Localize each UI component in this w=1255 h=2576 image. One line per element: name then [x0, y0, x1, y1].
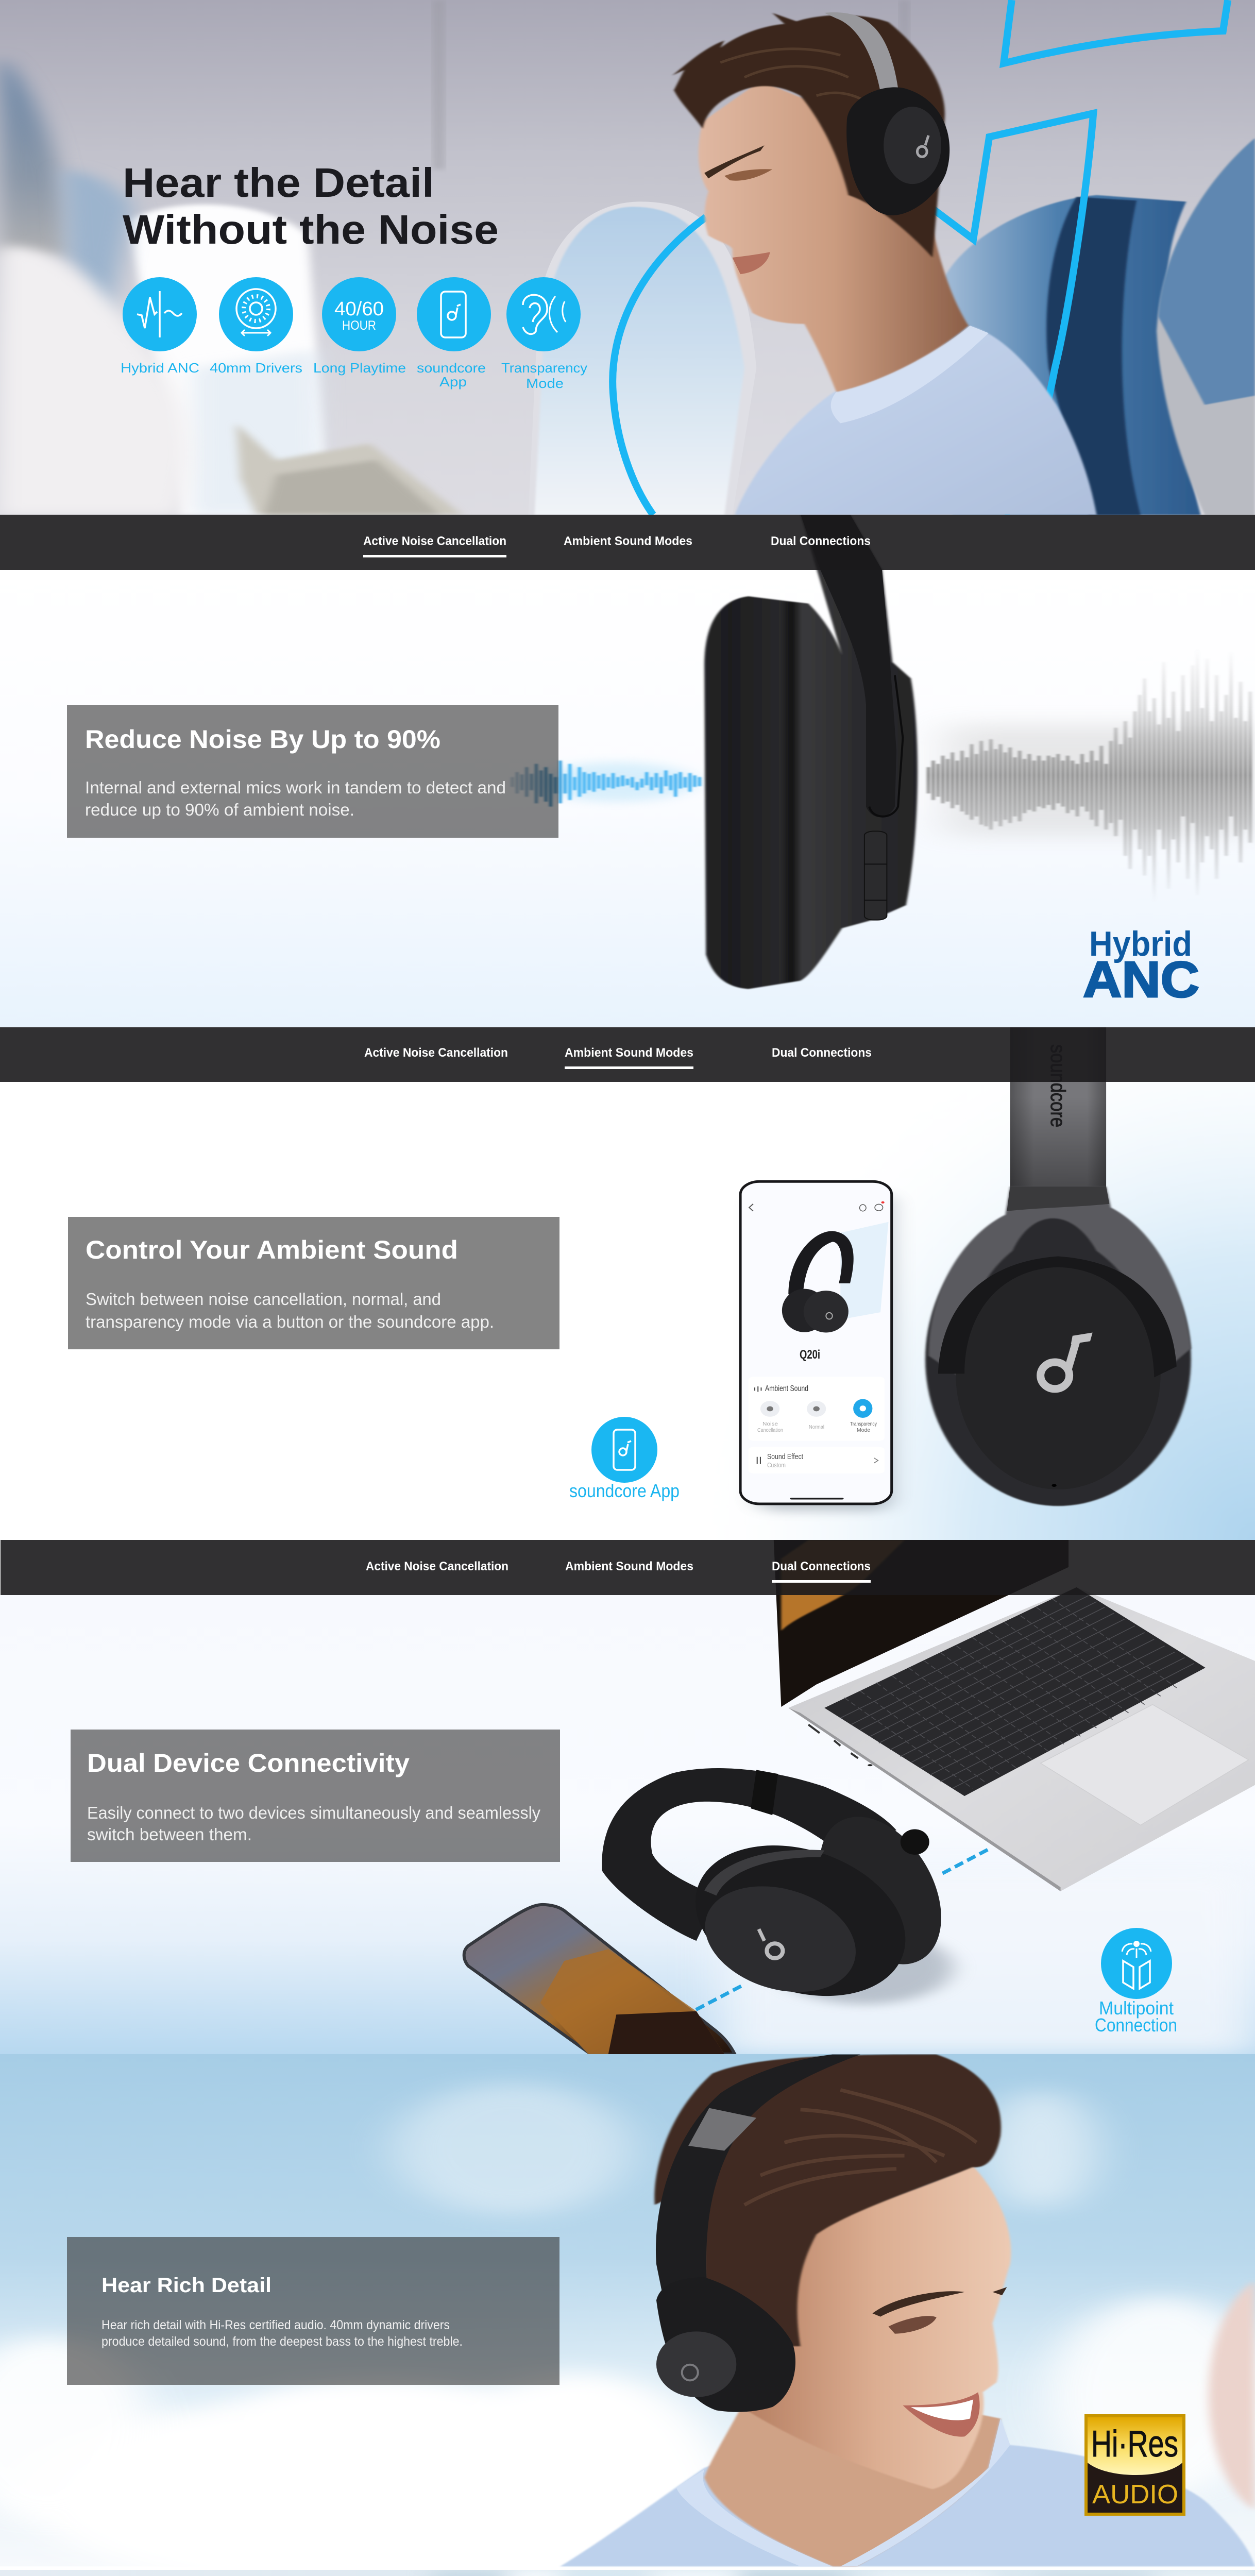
man: shirt	[735, 326, 1096, 515]
icon: multipoint connection: Multipoint	[1099, 1997, 1174, 2019]
text panel: reduce noise: Internal and external mics work in tandem to detect and	[85, 778, 506, 797]
icon: multipoint connection: Connection	[1095, 2014, 1177, 2036]
man: sweater	[561, 2418, 1255, 2566]
icon: playtime	[322, 277, 396, 351]
section: active noise cancellation	[0, 514, 1255, 1027]
logo: Hi-Res Audio: Hi·Res	[1091, 2424, 1178, 2465]
folded headphones	[602, 1768, 961, 2005]
text panel: ambient sound: Control Your Ambient Sound	[86, 1235, 458, 1264]
man: neck	[704, 2379, 1000, 2566]
icon captions: App	[439, 374, 467, 389]
laptop, phone and headphone flat lay	[464, 1529, 1255, 2054]
section: long-lasting playtime	[0, 2569, 1255, 2576]
big headphone	[925, 1023, 1191, 1506]
navigation bar 1	[0, 515, 1255, 570]
text panel: hear rich detail	[67, 2237, 559, 2385]
navigation bar 3: Active Noise Cancellation	[366, 1560, 508, 1573]
phone mockup: soundcore app: Noise	[762, 1421, 778, 1427]
phone mockup: soundcore app: Q20i	[800, 1348, 820, 1362]
text panel: ambient sound: Switch between noise cancellation, normal, and	[86, 1290, 441, 1309]
phone mockup: soundcore app: Ambient Sound	[765, 1384, 808, 1393]
section: hear rich detail	[0, 2054, 1255, 2576]
navigation bar 2: Dual Connections	[772, 1046, 872, 1060]
logo: Hybrid ANC: Hybrid	[1089, 924, 1192, 963]
laptop	[773, 1529, 1255, 1891]
sound wave: grey	[944, 724, 1255, 836]
icon: soundcore app badge	[569, 1417, 680, 1501]
navigation bar 3: Dual Connections	[772, 1560, 871, 1573]
man: hair	[654, 2055, 1001, 2346]
section: ambient sound	[0, 1023, 1255, 1540]
icon captions: soundcore	[417, 360, 486, 376]
icon: multipoint connection	[1095, 1928, 1177, 2036]
headphone ear cup	[704, 514, 918, 989]
icon captions: Mode	[526, 376, 564, 391]
man: face	[744, 2165, 1011, 2489]
logo: Hybrid ANC: ANC	[1083, 951, 1199, 1008]
icon: soundcore app	[417, 277, 491, 351]
photo: man against the sky	[0, 2054, 1255, 2576]
clouds	[0, 2083, 1255, 2576]
sound wave: blue	[536, 762, 697, 802]
phone mockup: soundcore app: Mode	[857, 1428, 870, 1433]
icon captions: Hybrid ANC	[121, 360, 199, 376]
text panel: reduce noise: reduce up to 90% of ambient noise.	[85, 800, 354, 819]
blue line art	[613, 0, 1228, 515]
navigation bar 2: Active Noise Cancellation	[364, 1046, 508, 1060]
logo: Hybrid ANC	[1083, 924, 1199, 1008]
navigation bar 1: Ambient Sound Modes	[564, 534, 692, 548]
phone mockup: soundcore app	[740, 1181, 892, 1511]
headphones on man	[656, 2055, 860, 2412]
icon: playtime: 40/60	[334, 298, 384, 320]
airplane seats	[941, 195, 1200, 515]
hero title	[123, 160, 499, 252]
navigation bar 3	[1, 1540, 1255, 1595]
icon captions: Long Playtime	[313, 360, 406, 376]
text panel: dual device: Dual Device Connectivity	[87, 1749, 410, 1777]
navigation bar 3: Ambient Sound Modes	[565, 1560, 693, 1573]
text panel: dual device: switch between them.	[87, 1825, 252, 1844]
smartphone	[464, 1905, 735, 2054]
navigation bar 1: Dual Connections	[771, 534, 871, 548]
feature icons row	[123, 277, 581, 351]
phone mockup: soundcore app: Custom	[767, 1461, 786, 1469]
text panel: hear rich detail: Hear rich detail with Hi-Res certified audio. 40mm dynamic drivers	[101, 2318, 450, 2332]
phone mockup: soundcore app: Sound Effect	[767, 1452, 804, 1461]
text panel: hear rich detail: Hear Rich Detail	[101, 2274, 272, 2297]
headphone side view and sound waves	[512, 514, 1255, 989]
icon captions	[121, 360, 587, 391]
text panel: ambient sound	[68, 1217, 559, 1349]
phone mockup: soundcore app: Cancellation	[757, 1428, 783, 1433]
icon captions: 40mm Drivers	[210, 360, 302, 376]
phone mockup: soundcore app: Normal	[809, 1425, 824, 1430]
navigation bar 2: Ambient Sound Modes	[565, 1046, 693, 1060]
hero photo: airplane cabin	[0, 0, 1255, 515]
text panel: hear rich detail: produce detailed sound, from the deepest bass to the highest treble.	[101, 2334, 463, 2349]
logo: Hi-Res Audio: AUDIO	[1092, 2480, 1178, 2510]
icon: transparency ear	[506, 277, 581, 351]
phone mockup: soundcore app: Transparency	[850, 1421, 877, 1427]
dashed connection lines	[693, 1850, 988, 2011]
headphones on man	[824, 12, 949, 215]
icon: hybrid ANC	[123, 277, 197, 351]
man: face and neck	[699, 81, 969, 392]
navigation bar 1: Active Noise Cancellation	[363, 534, 506, 548]
photo: blurred terminal and suitcase	[0, 2569, 1255, 2576]
text panel: dual device: Easily connect to two devices simultaneously and seamlessly	[87, 1803, 540, 1822]
logo: Hi-Res Audio	[1084, 2414, 1185, 2516]
text panel: reduce noise: Reduce Noise By Up to 90%	[85, 725, 440, 754]
navigation bar 2	[0, 1027, 1255, 1082]
icon: playtime: HOUR	[342, 318, 376, 333]
hero title: Without the Noise	[123, 207, 499, 252]
hero title: Hear the Detail	[123, 160, 434, 206]
text panel: ambient sound: transparency mode via a button or the soundcore app.	[86, 1312, 494, 1331]
section: dual connections	[0, 1529, 1255, 2054]
hero section: man on airplane	[0, 0, 1255, 515]
text panel: dual device	[71, 1730, 560, 1862]
icon: 40mm drivers	[219, 277, 293, 351]
headband logotype: soundcore	[1046, 1044, 1069, 1127]
icon: soundcore app badge: soundcore App	[569, 1480, 680, 1501]
icon captions: Transparency	[501, 360, 587, 376]
man: hair	[672, 13, 945, 258]
text panel: reduce noise	[67, 705, 558, 838]
